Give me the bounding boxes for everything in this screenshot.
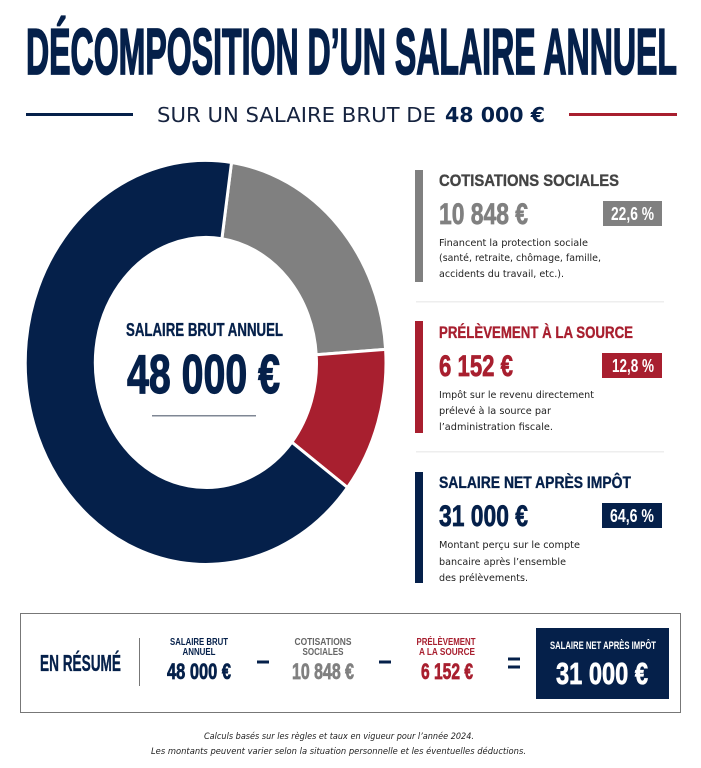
summary: cotisations bbox=[292, 637, 354, 684]
description: Financent la protection sociale bbox=[439, 238, 588, 249]
summary: cotisations: 10 848 € bbox=[292, 659, 354, 684]
badge: 64,6 % bbox=[610, 506, 654, 526]
description: bancaire après l’ensemble bbox=[439, 556, 566, 568]
heading: SALAIRE NET APRÈS IMPÔT bbox=[439, 473, 631, 492]
operator: minus bbox=[379, 660, 391, 664]
description: l’administration fiscale. bbox=[439, 422, 553, 433]
summary: salaire net bbox=[536, 628, 669, 699]
segment: prélèvement à la source bbox=[292, 349, 386, 488]
subtitle with rules bbox=[26, 103, 677, 127]
badge: 22,6 % bbox=[611, 204, 654, 224]
summary: salaire net: 31 000 € bbox=[556, 656, 648, 691]
amount: 10 848 € bbox=[439, 198, 528, 231]
summary: salaire brut: 48 000 € bbox=[167, 659, 231, 684]
donut center label: SALAIRE BRUT ANNUEL bbox=[126, 320, 283, 340]
heading: COTISATIONS SOCIALES bbox=[439, 172, 619, 190]
panel: prélèvement à la source bbox=[415, 321, 662, 433]
summary: prélèvement bbox=[416, 635, 476, 684]
heading: PRÉLÈVEMENT À LA SOURCE bbox=[439, 323, 633, 342]
operator: equals bbox=[508, 658, 520, 668]
amount: 31 000 € bbox=[439, 500, 528, 533]
description bbox=[439, 238, 601, 280]
summary: prélèvement: A LA SOURCE bbox=[419, 647, 475, 658]
badge bbox=[602, 503, 662, 528]
description: accidents du travail, etc.). bbox=[439, 269, 564, 280]
summary: salaire brut: SALAIRE BRUT bbox=[170, 637, 228, 648]
amount: 6 152 € bbox=[439, 350, 513, 383]
badge: 12,8 % bbox=[612, 356, 654, 376]
summary: salaire brut: ANNUEL bbox=[182, 647, 216, 658]
operator: minus bbox=[257, 660, 269, 664]
donut chart bbox=[25, 160, 386, 564]
footnote: Calculs basés sur les règles et taux en vigueur pour l’année 2024. bbox=[204, 731, 474, 742]
summary: salaire net: SALAIRE NET APRÈS IMPÔT bbox=[550, 639, 656, 652]
description bbox=[439, 540, 580, 584]
description bbox=[439, 389, 594, 433]
subtitle with rules: 48 000 € bbox=[445, 103, 545, 127]
summary: prélèvement: 6 152 € bbox=[421, 659, 473, 684]
badge bbox=[603, 201, 662, 226]
description: prélevé à la source par bbox=[439, 405, 552, 417]
summary: cotisations: COTISATIONS bbox=[294, 637, 352, 648]
footnote: Les montants peuvent varier selon la situation personnelle et les éventuelles déductions. bbox=[151, 746, 526, 757]
subtitle with rules: SUR UN SALAIRE BRUT DE bbox=[157, 103, 436, 127]
donut center amount: 48 000 € bbox=[127, 343, 280, 405]
summary heading: EN RÉSUMÉ bbox=[40, 649, 121, 676]
summary: salaire brut bbox=[167, 637, 231, 684]
summary: prélèvement: PRÉLÈVEMENT bbox=[416, 635, 476, 648]
description: Montant perçu sur le compte bbox=[439, 540, 580, 551]
description: (santé, retraite, chômage, famille, bbox=[439, 252, 601, 264]
description: Impôt sur le revenu directement bbox=[439, 389, 594, 401]
segment: salaire net bbox=[25, 160, 348, 564]
panel: salaire net après impôt bbox=[415, 472, 662, 584]
description: des prélèvements. bbox=[439, 572, 528, 584]
badge bbox=[602, 353, 662, 378]
summary: cotisations: SOCIALES bbox=[302, 647, 344, 658]
footnote bbox=[151, 731, 526, 757]
panel: cotisations sociales bbox=[415, 170, 662, 282]
panel: en résumé bbox=[20, 614, 680, 712]
segment: cotisations sociales bbox=[222, 162, 386, 355]
